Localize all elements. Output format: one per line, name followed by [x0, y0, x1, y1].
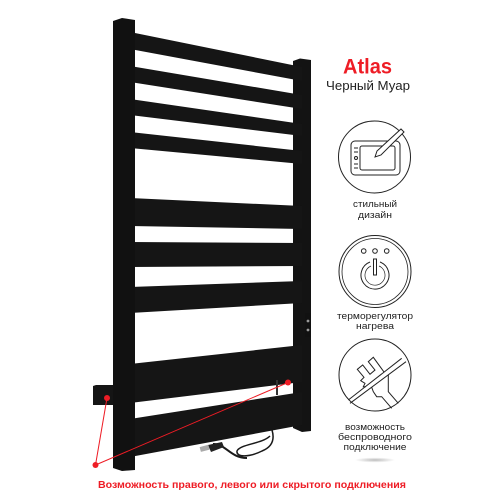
label: heating thermostat: [337, 311, 413, 331]
label: heating thermostat: нагрева: [356, 321, 394, 331]
label: wireless connection: возможность: [345, 422, 405, 432]
thermostat control: [305, 313, 311, 337]
label: stylish design: стильный: [353, 199, 397, 209]
rungs: [130, 32, 302, 457]
icon: crossed out plug: [339, 339, 411, 411]
wall connector box: [93, 385, 113, 405]
power cable and plug: [200, 380, 277, 458]
label: heating thermostat: терморегулятор: [337, 311, 413, 321]
right upright: [293, 58, 311, 432]
label: wireless connection: [338, 422, 412, 452]
connection caption: Возможность правого, левого или скрытого подключения: [98, 480, 406, 491]
icon: tablet and pen: [338, 121, 410, 193]
subtitle: Черный Муар: [326, 78, 410, 93]
left upright: [113, 18, 135, 471]
red callout lines: [92, 380, 291, 468]
icon: thermostat power button: [339, 236, 411, 308]
title: Atlas: [343, 56, 392, 78]
label: stylish design: [353, 199, 397, 220]
label: wireless connection: беспроводного: [338, 432, 412, 442]
label: stylish design: дизайн: [358, 210, 392, 220]
shadow under text: [355, 458, 395, 462]
label: wireless connection: подключение: [344, 442, 406, 452]
towel rail product: [93, 18, 311, 471]
